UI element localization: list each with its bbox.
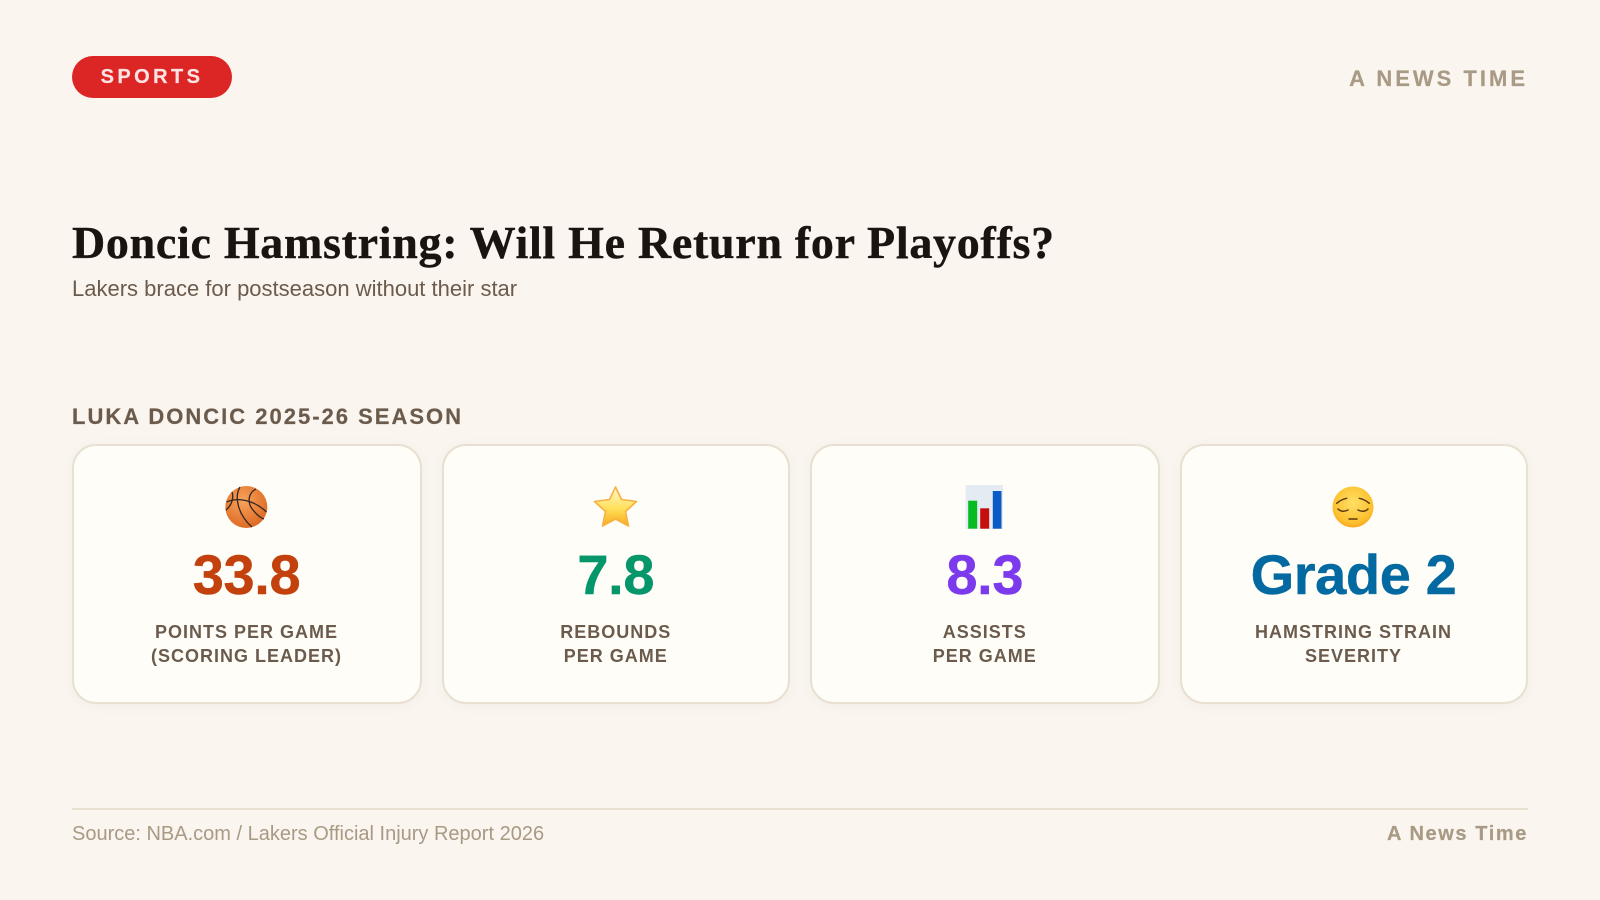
title: Doncic Hamstring: Will He Return for Playoffs?: [72, 217, 1055, 268]
value: 7.8: [577, 543, 654, 606]
value: Grade 2: [1251, 543, 1456, 606]
label: ASSISTS: [943, 622, 1027, 642]
brand name: A NEWS TIME: [1349, 66, 1528, 91]
source note: Source: NBA.com / Lakers Official Injury Report 2026: [72, 823, 544, 845]
label: POINTS PER GAME: [155, 622, 338, 642]
icon: basketball: [225, 486, 268, 528]
icon: bar chart: [966, 485, 1003, 529]
label: (SCORING LEADER): [151, 646, 342, 666]
label: [1255, 622, 1452, 666]
panel: hamstring strain severity: [1180, 444, 1528, 704]
label: SEVERITY: [1305, 646, 1402, 666]
icon: pensive face: [1332, 486, 1374, 528]
badge: sports: [72, 56, 232, 98]
subtitle: Lakers brace for postseason without their star: [72, 276, 517, 301]
panel: rebounds per game: [442, 444, 790, 704]
label: [151, 622, 342, 666]
value: 8.3: [946, 543, 1023, 606]
panel: points per game: [72, 444, 422, 704]
footer brand: A News Time: [1387, 823, 1528, 845]
label: PER GAME: [564, 646, 668, 666]
icon: star: [594, 486, 638, 527]
label: REBOUNDS: [560, 622, 671, 642]
section heading: LUKA DONCIC 2025-26 SEASON: [72, 404, 463, 429]
label: HAMSTRING STRAIN: [1255, 622, 1452, 642]
badge: sports: SPORTS: [101, 66, 203, 88]
value: 33.8: [193, 543, 300, 606]
panel: assists per game: [810, 444, 1160, 704]
label: [560, 622, 671, 666]
label: PER GAME: [933, 646, 1037, 666]
label: [933, 622, 1037, 666]
